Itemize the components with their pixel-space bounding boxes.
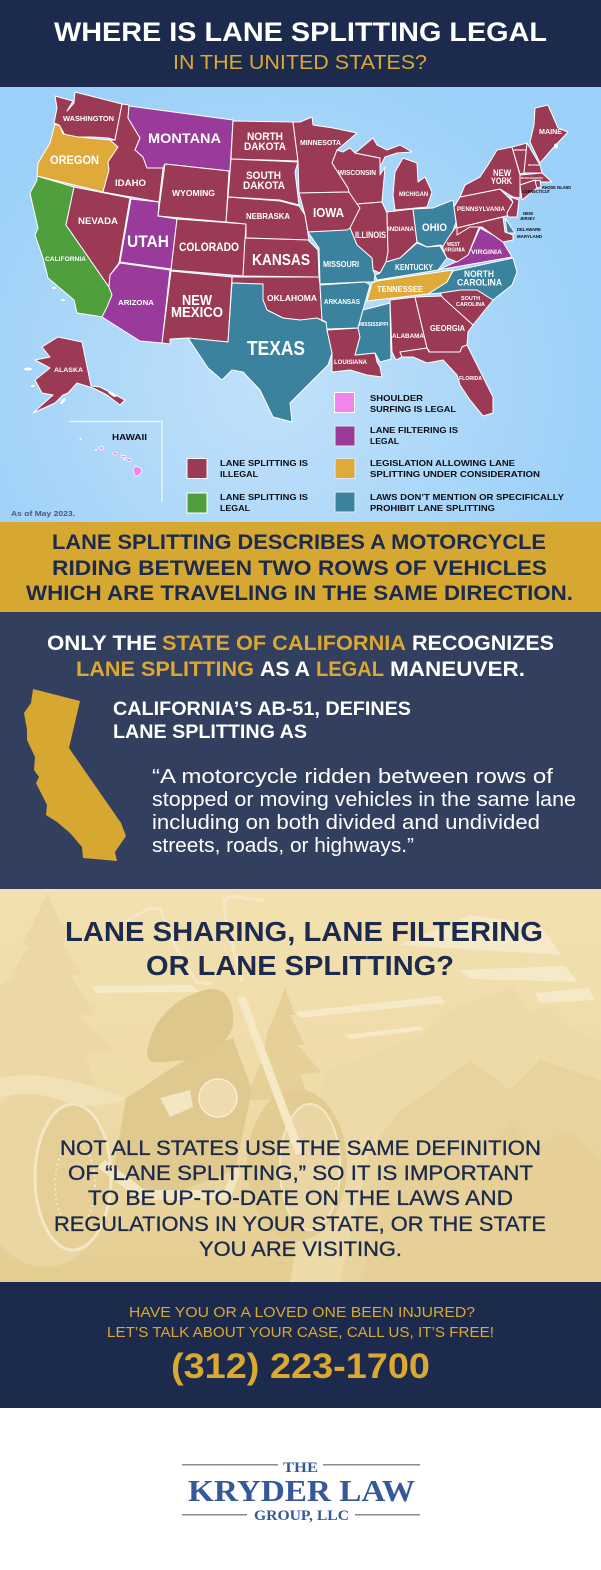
state: Kentucky [375, 243, 447, 280]
illustration: landscape and motorcycle [0, 892, 601, 1282]
state: Idaho: IDAHO [115, 178, 146, 188]
state: Utah: UTAH [127, 232, 169, 251]
state: Louisiana: LOUISIANA [334, 359, 367, 366]
state: Ohio [413, 200, 456, 248]
state: Iowa: IOWA [313, 205, 345, 220]
legend item: laws don't mention: PROHIBIT LANE SPLITTING [370, 503, 495, 513]
quote [152, 766, 576, 857]
state: New Mexico [162, 271, 232, 344]
state: Mississippi: MISSISSIPPI [359, 322, 389, 328]
subheading: AB-51: LANE SPLITTING AS [113, 722, 307, 743]
state: California: CALIFORNIA [45, 256, 86, 263]
logo: The Kryder Law Group [182, 1460, 420, 1524]
state: Georgia [415, 296, 473, 352]
small state labels on the east coast: MASSACHUSETTS [521, 176, 543, 180]
state: Kansas [243, 238, 319, 277]
state: Alabama: ALABAMA [392, 333, 424, 340]
legend item: lane filtering legal: LEGAL [370, 436, 399, 446]
quote: stopped or moving vehicles in the same lane [152, 789, 576, 811]
state: Ohio: OHIO [422, 222, 447, 234]
state: Montana [128, 106, 233, 171]
legend item: laws don't mention: LAWS DON’T MENTION OR SPECIFICALLY [370, 492, 564, 502]
heading: only California: STATE OF CALIFORNIA [162, 632, 406, 655]
quote: including on both divided and undivided [152, 812, 540, 834]
state: Nevada [66, 187, 130, 287]
state: South Dakota: SOUTH [246, 170, 281, 182]
state: Colorado [171, 219, 246, 276]
small state labels on the east coast: NEW [523, 211, 534, 216]
state: Arizona: ARIZONA [118, 298, 155, 307]
state: Oklahoma: OKLAHOMA [267, 293, 317, 303]
motorcycle rear wheel rim [35, 1104, 111, 1250]
panel: definition band: WHICH ARE TRAVELING IN THE SAME DIRECTION. [26, 581, 573, 605]
state: South Dakota [228, 159, 299, 205]
heading: only California: RECOGNIZES [412, 632, 554, 655]
state: South Carolina: SOUTH [461, 296, 480, 302]
heading: only California: LEGAL [316, 658, 384, 681]
mountains [290, 987, 601, 1282]
heading: LANE SHARING, LANE FILTERING [65, 916, 543, 947]
state: Massachusetts [520, 173, 552, 185]
state: Nebraska [226, 197, 309, 240]
state: Connecticut [520, 180, 537, 200]
state: Indiana: INDIANA [388, 226, 414, 233]
state: South Carolina: CAROLINA [456, 302, 485, 308]
state: New Mexico: MEXICO [171, 305, 223, 321]
state: New Jersey [507, 197, 519, 217]
state: Florida: FLORIDA [459, 376, 482, 382]
motorcycle engine [97, 1079, 240, 1200]
state: Minnesota: MINNESOTA [300, 138, 342, 147]
small state labels on the east coast: MARYLAND [517, 234, 543, 239]
small state labels on the east coast: JERSEY [520, 216, 535, 221]
tree: left pine [0, 892, 113, 1085]
quote: streets, roads, or highways.” [152, 835, 414, 857]
state: Arkansas: ARKANSAS [324, 297, 360, 306]
state: Michigan upper [355, 138, 412, 167]
state: Idaho [103, 104, 163, 202]
state: Nevada: NEVADA [78, 216, 118, 227]
state: Utah [120, 199, 177, 269]
state: Arkansas [320, 282, 370, 329]
state: New York [460, 147, 520, 198]
motorcycle front wheel [247, 1089, 347, 1241]
state: Delaware [505, 218, 515, 233]
state: Arizona [102, 263, 170, 343]
state: Montana: MONTANA [148, 130, 221, 146]
state: Washington [54, 92, 122, 140]
motorcycle front fork [237, 996, 304, 1155]
legend item: legislation under consideration [335, 458, 540, 479]
state: Alabama [390, 297, 427, 360]
state: Wisconsin [332, 148, 385, 204]
state: Oklahoma [232, 277, 322, 320]
legend item: lane splitting legal [187, 492, 308, 513]
state: Missouri: MISSOURI [323, 260, 359, 269]
legend item: shoulder surfing legal: SHOULDER [370, 393, 423, 403]
small state labels on the east coast [513, 148, 572, 239]
state: Oregon: OREGON [50, 153, 99, 167]
state: Illinois [350, 202, 388, 273]
legend item: lane splitting legal: LANE SPLITTING IS [220, 492, 308, 502]
panel: definition band: RIDING BETWEEN TWO ROWS OF VEHICLES [52, 556, 547, 580]
panel: definition band [0, 522, 601, 612]
state: Missouri [308, 228, 375, 284]
title: WHERE IS LANE SPLITTING LEGAL [54, 17, 547, 47]
legend item: laws don't mention [335, 492, 564, 513]
state: Rhode Island [535, 180, 541, 188]
state: South Carolina [440, 290, 493, 325]
state: Georgia: GEORGIA [430, 324, 465, 333]
state: North Dakota: DAKOTA [244, 141, 286, 153]
header band [0, 0, 601, 87]
panel: lane sharing, filtering or splitting [0, 889, 601, 1282]
legend item: lane filtering legal: LANE FILTERING IS [370, 425, 458, 435]
legend item: legislation under consideration: LEGISLATION ALLOWING LANE [370, 458, 515, 468]
legend item: lane splitting illegal [187, 458, 308, 479]
heading: only California: ONLY THE [47, 632, 157, 655]
state: West Virginia: WEST [447, 242, 460, 248]
subtitle: IN THE UNITED STATES? [173, 51, 427, 74]
state: Kentucky: KENTUCKY [395, 263, 434, 272]
heading: OR LANE SPLITTING? [146, 950, 454, 981]
sky stripes [92, 915, 595, 1039]
tree: centre pine [245, 988, 321, 1100]
logo: The Kryder Law Group: THE [283, 1460, 318, 1476]
body text: OF “LANE SPLITTING,” SO IT IS IMPORTANT [68, 1161, 533, 1185]
small islands [24, 144, 558, 405]
icon: California silhouette [24, 689, 126, 861]
state: New York: YORK [491, 176, 512, 186]
state: Alaska: ALASKA [54, 367, 83, 374]
state: Alaska [33, 337, 125, 413]
state: Maine [530, 105, 568, 163]
motorcycle rear fender [0, 1075, 126, 1106]
date note: As of May 2023. [11, 509, 75, 518]
legend item: shoulder surfing legal [334, 392, 456, 414]
state: Virginia [438, 228, 512, 270]
state: Nebraska: NEBRASKA [246, 211, 290, 221]
state: Florida [400, 345, 493, 416]
body text: REGULATIONS IN YOUR STATE, OR THE STATE [54, 1212, 546, 1236]
state: Colorado: COLORADO [179, 240, 239, 254]
legend item: lane splitting legal: LEGAL [220, 503, 250, 513]
state: Wyoming: WYOMING [172, 188, 215, 198]
heading: only California: AS A [260, 658, 310, 681]
state: Minnesota [293, 117, 357, 193]
panel: California [0, 612, 601, 889]
state: Michigan lower [393, 158, 432, 210]
state: Vermont [512, 143, 527, 174]
small state labels on the east coast: VERMONT [513, 148, 526, 152]
Hawaii inset with frame and islands: HAWAII [112, 433, 147, 442]
body text: TO BE UP-TO-DATE ON THE LAWS AND [88, 1186, 513, 1210]
quote: “A motorcycle ridden between rows of [152, 766, 554, 788]
motorcycle body and tank [147, 989, 233, 1062]
state: Iowa [299, 192, 360, 232]
heading: only California: MANEUVER. [390, 658, 525, 681]
state: Maine: MAINE [539, 129, 562, 136]
state: New Hampshire [524, 143, 542, 173]
state: Tennessee: TENNESSEE [377, 285, 424, 294]
heading: only California [47, 632, 554, 681]
body text [54, 1136, 546, 1261]
state: Indiana [386, 209, 417, 262]
small state labels on the east coast: DELAWARE [517, 227, 541, 232]
body text: NOT ALL STATES USE THE SAME DEFINITION [60, 1136, 541, 1160]
body text: YOU ARE VISITING. [199, 1237, 402, 1261]
logo: The Kryder Law Group: KRYDER LAW [188, 1473, 415, 1508]
legend item: shoulder surfing legal: SURFING IS LEGAL [370, 404, 456, 414]
state: Michigan lower: MICHIGAN [399, 191, 428, 198]
legend [187, 392, 564, 513]
phone number: (312) 223-1700 [171, 1347, 430, 1386]
state: Wyoming [158, 164, 229, 222]
heading: only California: LANE SPLITTING [76, 658, 254, 681]
small state labels on the east coast: CONNECTICUT [522, 189, 550, 194]
state: Texas [188, 283, 332, 422]
heading [65, 916, 543, 981]
legend item: legislation under consideration: SPLITTING UNDER CONSIDERATION [370, 469, 540, 479]
state: Maryland [457, 217, 513, 242]
state: North Carolina: NORTH [464, 269, 494, 279]
legend item: lane splitting illegal: LANE SPLITTING IS [220, 458, 308, 468]
panel: map of the United States [0, 87, 601, 522]
subheading: AB-51 [113, 699, 411, 743]
state: Tennessee [367, 270, 453, 301]
state: Oregon [37, 124, 118, 192]
state: Louisiana [327, 328, 382, 377]
motorcycle rear tire [0, 1083, 113, 1267]
panel: call to action: HAVE YOU OR A LOVED ONE BEEN INJURED? [129, 1304, 475, 1321]
state: New Mexico: NEW [182, 293, 212, 309]
state: South Dakota: DAKOTA [243, 180, 285, 192]
state: Kansas: KANSAS [252, 252, 310, 269]
Hawaii inset with frame and islands [69, 422, 162, 502]
state: California [30, 176, 112, 317]
legend item: lane filtering legal [335, 425, 458, 446]
small state labels on the east coast: RHODE ISLAND [542, 185, 572, 190]
legend item: lane splitting illegal: ILLEGAL [220, 469, 258, 479]
state: North Carolina [428, 258, 517, 300]
logo: The Kryder Law Group: GROUP, LLC [254, 1508, 349, 1524]
panel: call to action: LET’S TALK ABOUT YOUR CASE, CALL US, IT’S FREE! [107, 1324, 494, 1341]
panel: call to action [0, 1282, 601, 1408]
state: Illinois: ILLINOIS [355, 230, 386, 240]
state: Pennsylvania: PENNSYLVANIA [457, 206, 505, 213]
small state labels on the east coast: NEW HAMPSHIRE [528, 163, 540, 167]
state: West Virginia: VIRGINIA [443, 248, 465, 254]
state: North Dakota [231, 121, 298, 161]
state: Virginia: VIRGINIA [471, 249, 502, 256]
state: Washington: WASHINGTON [63, 114, 114, 123]
motorcycle handlebars [125, 896, 264, 984]
state: Pennsylvania [454, 189, 513, 228]
state: North Dakota: NORTH [247, 131, 283, 143]
subheading: AB-51: CALIFORNIA’S AB-51, DEFINES [113, 699, 411, 720]
state: Texas: TEXAS [247, 338, 305, 360]
state: North Carolina: CAROLINA [457, 278, 502, 288]
state: Wisconsin: WISCONSIN [338, 168, 376, 177]
state: West Virginia [442, 225, 480, 262]
state: New York: NEW [493, 168, 511, 178]
state: Mississippi [355, 303, 391, 362]
panel: definition band: LANE SPLITTING DESCRIBES A MOTORCYCLE [52, 530, 546, 554]
